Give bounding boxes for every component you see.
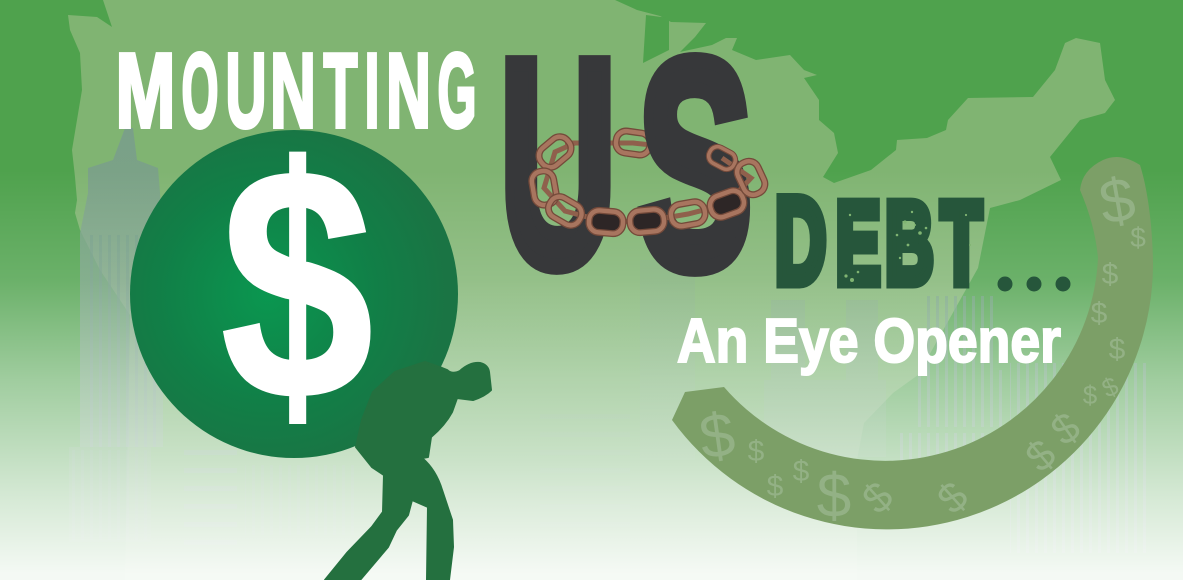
dollar signs on arc: $	[1102, 258, 1119, 291]
headline word MOUNTING: T	[324, 32, 358, 150]
headline word MOUNTING: U	[226, 32, 266, 150]
headline word MOUNTING: O	[182, 32, 218, 150]
headline word MOUNTING: N	[386, 32, 431, 150]
dollar signs on arc: $	[767, 470, 784, 503]
chain rear links	[565, 130, 700, 156]
dollar signs on arc: $	[853, 472, 902, 523]
dollar signs on arc: $	[1091, 297, 1108, 330]
dollar boulder	[130, 100, 458, 469]
dollar signs on arc: $	[1109, 333, 1126, 366]
dollar signs on arc: $	[1097, 370, 1123, 404]
city skyline	[69, 128, 1148, 553]
dollar signs on arc: $	[1094, 165, 1140, 238]
headline word MOUNTING: I	[364, 32, 380, 150]
chain around US	[530, 133, 768, 234]
dollar signs on arc: $	[748, 435, 765, 468]
headline word MOUNTING: N	[270, 32, 316, 150]
infographic canvas: G	[438, 32, 476, 150]
dollar signs on arc: $	[695, 400, 739, 473]
headline word DEBT	[775, 173, 982, 310]
dollar signs on arc: $	[928, 472, 977, 523]
headline word US: S	[638, 1, 752, 330]
dollar signs on arc	[695, 165, 1146, 531]
ellipsis	[998, 276, 1070, 292]
dollar signs on arc: $	[817, 462, 851, 531]
subtitle: An Eye Opener	[677, 307, 1061, 376]
dollar signs on arc: $	[793, 455, 810, 488]
headline word US: U	[500, 0, 616, 326]
dollar signs on arc: $	[1016, 430, 1064, 481]
dollar signs on arc: $	[1083, 380, 1098, 410]
headline word MOUNTING: M	[116, 32, 176, 150]
lake	[643, 15, 669, 63]
dollar signs on arc: $	[1130, 222, 1146, 253]
dollar signs on arc: $	[1042, 402, 1088, 454]
buildings right	[540, 260, 1148, 553]
big dollar sign: $	[221, 100, 373, 469]
headline word DEBT: D	[775, 173, 826, 310]
man carrying boulder	[325, 362, 491, 580]
dollar arc	[672, 157, 1153, 531]
headline word DEBT: EBT	[836, 179, 982, 309]
skyscraper left	[69, 128, 355, 550]
headline word US	[500, 0, 752, 330]
distressed texture	[844, 211, 971, 282]
